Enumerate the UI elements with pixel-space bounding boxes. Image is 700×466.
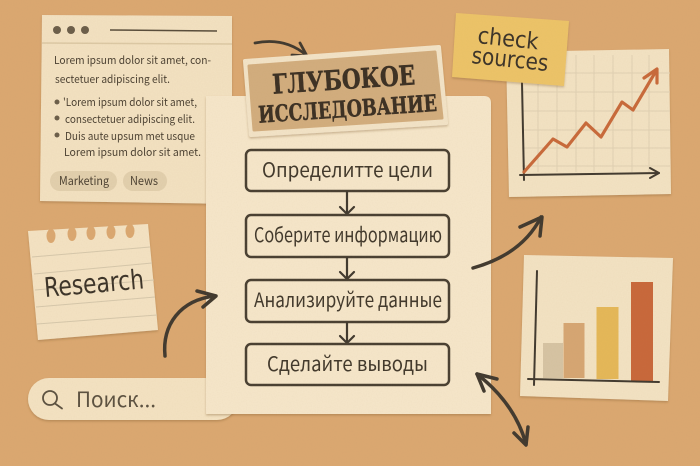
arrow: to charts (473, 217, 542, 268)
step 1: Определитте цели (262, 154, 433, 183)
step 2: Соберите информацию (254, 219, 442, 248)
panel: bar chart (520, 255, 673, 401)
title text: ИССЛЕДОВАНИЕ (257, 90, 438, 129)
binder holes (46, 224, 134, 243)
body text: Lorem ipsum dolor sit amet. (64, 144, 201, 160)
tag: News (123, 171, 167, 191)
panel: main flowchart sheet (206, 96, 491, 414)
step 3: Анализируйте данные (254, 284, 442, 313)
panel: research note (28, 224, 158, 340)
arrow: to main panel from left (165, 291, 216, 356)
step 4: Сделайте выводы (267, 348, 428, 377)
handwritten word: Research (43, 264, 145, 304)
bar 4 (631, 282, 653, 381)
trend line (524, 69, 657, 172)
window dots (53, 26, 89, 34)
title text: ГЛУБОКОЕ (271, 60, 416, 101)
bar 3 (596, 307, 618, 379)
search placeholder: Поиск... (76, 384, 156, 414)
search bar (28, 378, 238, 420)
arrow: double-headed (477, 374, 528, 445)
sticky note: check sources: sources (470, 43, 550, 77)
axes (520, 83, 659, 180)
tag: Marketing: Marketing (59, 172, 109, 189)
arrow: to title (255, 42, 307, 56)
bar 1 (543, 343, 563, 378)
bar 2 (564, 323, 584, 378)
title text (255, 59, 438, 129)
step 2 (246, 215, 449, 257)
title plate (245, 47, 446, 135)
panel: line chart (506, 49, 671, 197)
sticky note: check sources: check (476, 23, 540, 55)
arrow: step 1 to 2 (340, 192, 354, 214)
axes (528, 271, 659, 385)
step 1 (246, 150, 449, 191)
tag: News: News (130, 172, 158, 189)
body text: sectetuer adipiscing elit. (55, 71, 170, 87)
icon: magnifier (43, 391, 62, 408)
step 3 (246, 280, 449, 322)
sticky note: check sources (452, 13, 569, 86)
arrow: step 2 to 3 (340, 258, 354, 279)
body text: 'Lorem ipsum dolor sit amet, (63, 94, 197, 110)
arrow: step 3 to 4 (340, 323, 354, 343)
panel: browser window note (40, 15, 232, 204)
grid (522, 55, 670, 172)
body text: Duis aute upsum met usque (65, 128, 195, 144)
body text: consectetuer adipiscing elit. (65, 111, 195, 127)
step 4 (246, 344, 449, 385)
body text (54, 52, 211, 160)
body text: Lorem ipsum dolor sit amet, con- (54, 52, 211, 68)
bullets (54, 100, 60, 138)
